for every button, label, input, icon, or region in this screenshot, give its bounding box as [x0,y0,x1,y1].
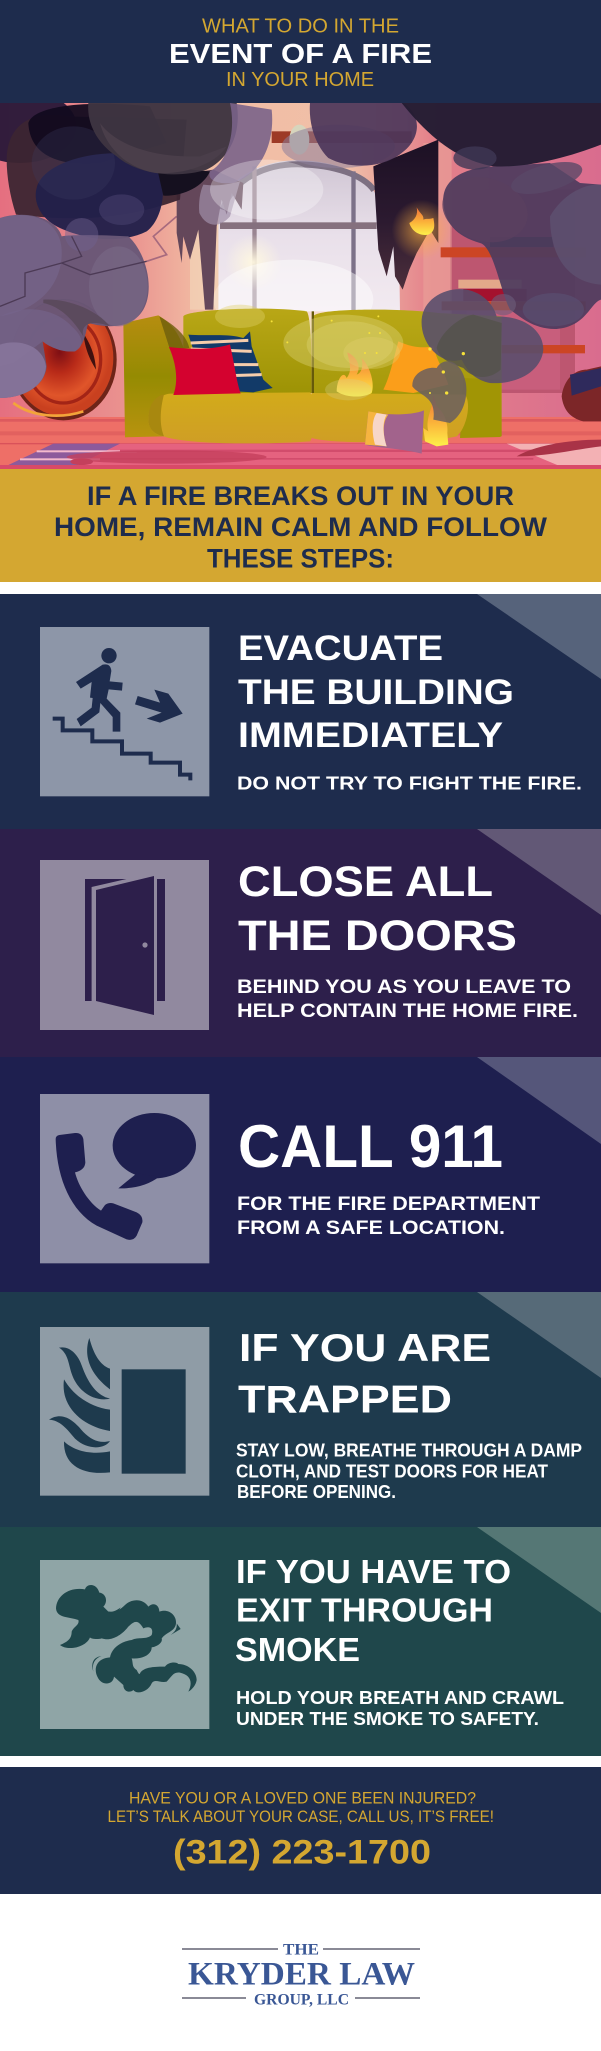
step text: FOR THE FIRE DEPARTMENT [237,1193,540,1215]
rug [0,440,601,469]
step heading line 2: THE BUILDING [238,673,514,712]
icon: flames beside door [40,1327,209,1496]
smoke cloud top-left [0,90,309,239]
gold heading panel [0,469,601,582]
smoke cloud right [435,163,601,329]
step text line 2: HELP CONTAIN THE HOME FIRE. [237,1000,578,1022]
heading line 2: HOME, REMAIN CALM AND FOLLOW [54,512,548,542]
icon: person on stairs with arrow [40,627,209,796]
window [190,160,400,340]
shelving wall panel [423,143,575,410]
step heading line 3: SMOKE [235,1631,360,1668]
wall disc decoration [12,324,117,420]
panel: if trapped [0,1292,601,1527]
wall cracks [147,216,177,261]
icon: smoke swirl [40,1560,209,1729]
ember sparks [271,315,381,354]
step text: DO NOT TRY TO FIGHT THE FIRE. [237,772,582,794]
orange pillow [383,341,448,393]
fallen pillow [365,410,424,454]
vase [562,366,601,421]
sofa [123,305,502,443]
logo the: THE [283,1942,319,1958]
step heading: EVACUATE [238,629,443,668]
step text: HOLD YOUR BREATH AND CRAWL [236,1687,564,1708]
cta line 1: HAVE YOU OR A LOVED ONE BEEN INJURED? [129,1790,476,1808]
step text line 2: UNDER THE SMOKE TO SAFETY. [236,1708,539,1729]
step text: STAY LOW, BREATHE THROUGH A DAMP [236,1440,582,1460]
step text line 2: FROM A SAFE LOCATION. [237,1217,505,1239]
left curtain [177,170,243,310]
floor flame [423,405,448,446]
sofa seats [148,392,314,443]
icon: phone and speech bubble [40,1094,209,1263]
title line 2: EVENT OF A FIRE [169,38,432,69]
logo group: GROUP, LLC [254,1992,349,2009]
step heading: IF YOU HAVE TO [236,1553,511,1590]
step heading line 3: IMMEDIATELY [238,716,503,755]
sofa right arm [460,378,501,438]
sofa left arm [123,315,190,437]
phone number: (312) 223-1700 [173,1834,431,1872]
panel: close doors [0,829,601,1057]
smoke cloud left [0,215,149,398]
icon: open door [40,860,209,1030]
step text line 3: BEFORE OPENING. [237,1482,396,1502]
hero illustration: burning living room [0,90,601,469]
red pillow [169,344,241,395]
step heading: CLOSE ALL [238,858,493,906]
step heading line 2: THE DOORS [238,912,517,960]
smoke over window [210,103,417,400]
panel: call 911 [0,1057,601,1292]
smoke cloud lower-right [412,289,543,423]
header panel [0,0,601,103]
smoke cloud top-right [402,103,601,200]
step text: BEHIND YOU AS YOU LEAVE TO [237,976,571,998]
step heading: CALL 911 [238,1113,503,1180]
step heading line 2: TRAPPED [238,1379,452,1422]
heading line 1: IF A FIRE BREAKS OUT IN YOUR [87,481,514,511]
sofa back [183,309,312,393]
title line 1: WHAT TO DO IN THE [202,16,399,38]
navy striped pillow [188,331,273,392]
panel: exit through smoke [0,1527,601,1756]
step text line 2: CLOTH, AND TEST DOORS FOR HEAT [236,1462,548,1482]
curtain flame [394,202,448,257]
logo name: KRYDER LAW [188,1956,415,1992]
panel: evacuate [0,594,601,829]
shelves with books [441,237,586,353]
right curtain [373,140,438,290]
title line 3: IN YOUR HOME [226,69,374,91]
cta line 2: LET’S TALK ABOUT YOUR CASE, CALL US, IT’S FREE! [108,1808,494,1826]
sofa flame [337,352,373,397]
step heading: IF YOU ARE [239,1327,491,1370]
call to action panel [0,1767,601,1894]
heading line 3: THESE STEPS: [207,544,394,574]
curtain rod [272,131,412,143]
floor [0,417,601,469]
step heading line 2: EXIT THROUGH [236,1592,493,1629]
logo: the kryder law group [182,1942,420,2009]
